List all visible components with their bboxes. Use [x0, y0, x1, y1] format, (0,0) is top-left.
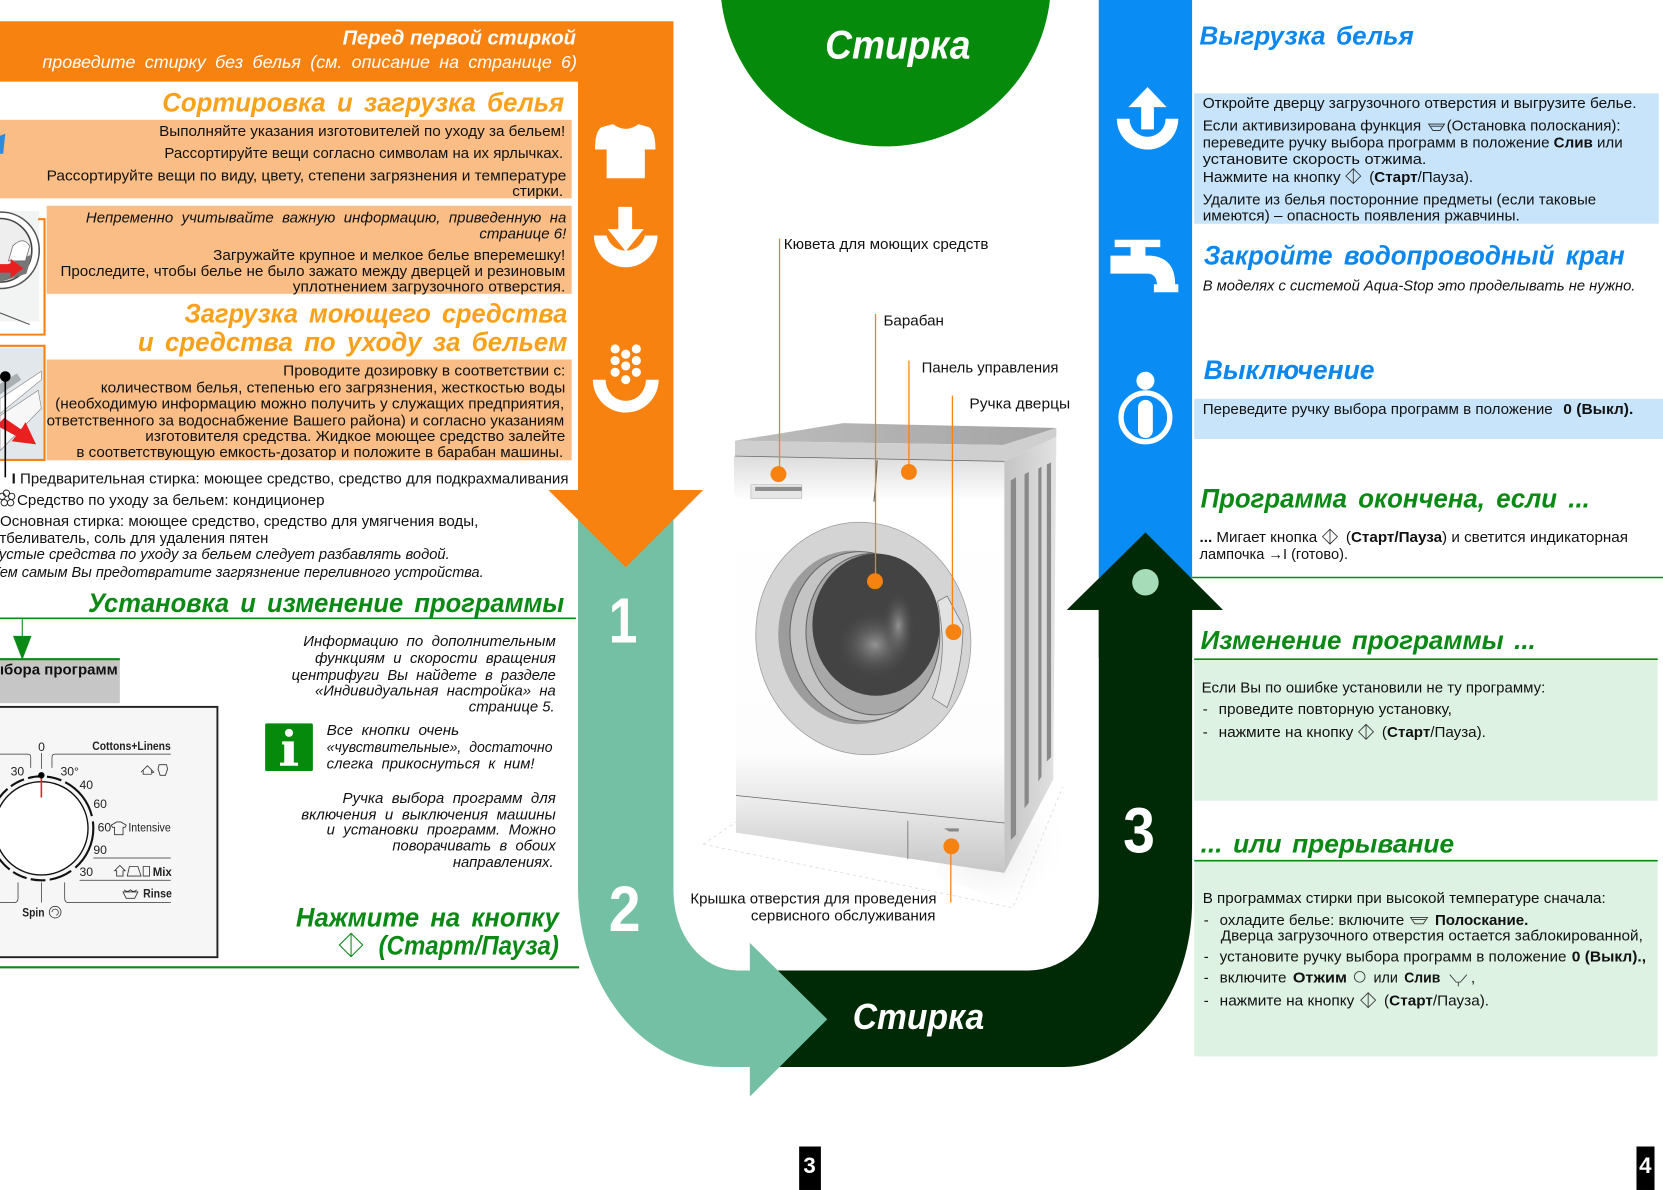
text interrupt: Дверца загрузочного отверстия остается заблокированной,	[1221, 929, 1643, 945]
text change: Если Вы по ошибке установили не ту программу:	[1202, 681, 1545, 697]
heading finished: Программа окончена, если ...	[1201, 484, 1590, 514]
background sorting	[0, 120, 572, 198]
text finished: ... Мигает кнопка	[1200, 530, 1318, 546]
heading: Перед первой стиркой	[343, 28, 576, 50]
text block sorting: Рассортируйте вещи согласно символам на их ярлычках.	[164, 146, 563, 162]
text block loading: Проследите, чтобы белье не было зажато между дверцей и резиновым	[60, 264, 565, 280]
text block: touch buttons: слегка прикоснуться к ним!	[327, 756, 535, 772]
text block: extras: центрифуги Вы найдете в разделе	[292, 668, 556, 684]
panel: close tap	[1203, 241, 1635, 295]
text block dosage	[47, 363, 565, 461]
heading detergent	[138, 298, 568, 357]
text interrupt: установите ручку выбора программ в положение	[1220, 949, 1566, 965]
rule bottom	[0, 966, 579, 968]
text block loading: Непременно учитывайте важную информацию, приведенную на	[86, 211, 566, 227]
icon: info	[265, 723, 313, 771]
icon: water tap	[1110, 240, 1178, 292]
text change: -	[1203, 702, 1208, 718]
washing machine illustration	[703, 423, 1071, 908]
icon: t-shirt	[595, 124, 655, 178]
background interrupt	[1194, 860, 1658, 1056]
text interrupt: ,	[1471, 971, 1475, 987]
text power off: Переведите ручку выбора программ в положение	[1203, 402, 1553, 418]
heading: press start: Нажмите на кнопку	[296, 902, 560, 932]
text interrupt: -	[1204, 949, 1209, 965]
text block dosage: количеством белья, степенью его загрязнения, жесткостью воды	[101, 380, 565, 396]
text block sorting: Выполняйте указания изготовителей по уходу за бельем!	[159, 124, 565, 140]
text block compartments: Основная стирка: моющее средство, средство для умягчения воды,	[0, 514, 478, 530]
text interrupt: (Старт/Пауза).	[1384, 993, 1489, 1009]
step number 2: 2	[609, 874, 641, 945]
text block: selector knob: Ручка выбора программ для	[343, 791, 556, 807]
callouts	[690, 237, 1070, 925]
text block unloading: установите скорость отжима.	[1203, 152, 1426, 168]
panel: sorting and loading	[0, 87, 572, 296]
text block: selector knob: и установки программ. Можно	[327, 823, 556, 839]
heading tap: Закройте водопроводный кран	[1204, 241, 1625, 271]
heading interrupt: ... или прерывание	[1201, 831, 1454, 859]
text interrupt: -	[1204, 971, 1209, 987]
rule change	[1194, 658, 1658, 660]
label: service cover	[690, 892, 936, 925]
text block: touch buttons: «чувствительные», достаточно	[327, 740, 553, 756]
blue sliver of photo	[0, 134, 5, 154]
heading program: Установка и изменение программы	[88, 588, 565, 618]
text block unloading: Откройте дверцу загрузочного отверстия и выгрузите белье.	[1203, 96, 1636, 112]
text change: -	[1203, 725, 1208, 741]
text finished: лампочка →I (готово).	[1200, 547, 1348, 563]
background unloading	[1194, 93, 1659, 224]
arrow 3: dark green up arrow	[769, 532, 1223, 1067]
text interrupt: Слив	[1404, 971, 1440, 987]
icon: detergent	[593, 344, 659, 413]
page number 4	[1636, 1147, 1655, 1190]
heading unloading: Выгрузка белья	[1200, 23, 1414, 51]
text block compartments: Тем самым Вы предотвратите загрязнение переливного устройства.	[0, 565, 484, 581]
arrow 3 head	[1067, 532, 1223, 658]
background power off	[1194, 399, 1663, 439]
note: проведите стирку без белья (см. описание на странице 6)	[42, 52, 577, 72]
text interrupt: охладите белье: включите	[1220, 913, 1404, 929]
text block dosage: (необходимую информацию можно получить у служащих предприятия,	[55, 396, 564, 412]
photo: detergent drawer	[0, 346, 45, 477]
text interrupt: В программах стирки при высокой температуре сначала:	[1203, 891, 1606, 907]
step number 3: 3	[1123, 796, 1155, 867]
text block: selector knob: поворачивать в обоих	[392, 839, 556, 855]
control panel dial: 40	[80, 778, 93, 792]
control panel dial: Rinse	[143, 886, 172, 900]
text block compartments: Средство по уходу за бельем: кондиционер	[17, 493, 325, 509]
text block: touch buttons: Все кнопки очень	[327, 723, 459, 739]
text block: extras	[292, 634, 556, 716]
control panel dial: Spin	[22, 905, 45, 919]
control panel dial: 90	[93, 843, 107, 857]
panel: power off	[1194, 355, 1663, 439]
text block: extras: странице 5.	[469, 700, 555, 716]
label: drum: Барабан	[883, 314, 944, 330]
text block unloading: (Остановка полоскания):	[1447, 118, 1621, 134]
text finished: (Старт/Пауза) и светится индикаторная	[1346, 530, 1628, 546]
background detergent	[47, 360, 572, 460]
heading sorting: Сортировка и загрузка белья	[162, 87, 565, 117]
text interrupt: включите	[1220, 971, 1286, 987]
control panel dial: Intensive	[128, 821, 171, 835]
text block: selector knob	[301, 791, 556, 871]
control panel dial: 60	[98, 821, 111, 835]
title: Стирка	[825, 22, 970, 67]
heading: press start: (Старт/Пауза)	[379, 931, 559, 961]
text block loading: странице 6!	[479, 227, 566, 243]
text block dosage: Проводите дозировку в соответствии с:	[283, 363, 565, 379]
label: control panel: Панель управления	[922, 360, 1058, 376]
text interrupt: 0 (Выкл).,	[1572, 949, 1646, 965]
text block unloading: Если активизирована функция	[1203, 118, 1421, 134]
text block dosage: изготовителя средства. Жидкое моющее средство залейте	[145, 429, 565, 445]
text block unloading: Удалите из белья посторонние предметы (если таковые	[1203, 193, 1596, 209]
text block: extras: функциям и скорости вращения	[315, 651, 556, 667]
text interrupt: -	[1204, 993, 1209, 1009]
pointer arrow	[14, 618, 31, 659]
control panel dial: 0	[38, 740, 45, 754]
arrow 2: teal curved arrow	[578, 490, 827, 1097]
text finished	[1200, 529, 1628, 563]
text power off: 0 (Выкл).	[1563, 402, 1633, 418]
control panel dial	[0, 707, 217, 957]
label: door handle: Ручка дверцы	[969, 396, 1070, 412]
text change: нажмите на кнопку	[1219, 725, 1354, 741]
text block: extras: Информацию по дополнительным	[303, 634, 556, 650]
panel: before first wash	[42, 28, 577, 72]
text block: selector knob: направлениях.	[453, 855, 554, 871]
text interrupt: нажмите на кнопку	[1220, 993, 1355, 1009]
icon: load arrow	[594, 207, 658, 267]
rule interrupt	[1194, 860, 1658, 862]
text block: extras: «Индивидуальная настройка» на	[315, 684, 556, 700]
control panel dial: Mix	[153, 865, 172, 879]
text block unloading: имеются) – опасность появления ржавчины.	[1203, 209, 1520, 225]
text block unloading: Нажмите на кнопку	[1203, 170, 1341, 186]
icon: power info	[1121, 372, 1170, 442]
text block sorting: Рассортируйте вещи по виду, цвету, степени загрязнения и температуре	[47, 168, 566, 184]
text interrupt: или	[1373, 971, 1398, 987]
rule finished	[1192, 577, 1663, 579]
text block sorting	[47, 124, 566, 200]
arrow label: wash: Стирка	[853, 996, 984, 1037]
text block loading: Загружайте крупное и мелкое белье вперемешку!	[213, 248, 565, 264]
control panel dial: 30	[11, 764, 24, 778]
text interrupt: -	[1204, 913, 1209, 929]
rule program	[0, 617, 576, 619]
text change: (Старт/Пауза).	[1382, 725, 1486, 741]
background change	[1194, 659, 1658, 801]
blue column	[1099, 0, 1192, 578]
label: dispenser: Кювета для моющих средств	[784, 237, 989, 253]
control panel dial: 30	[80, 865, 93, 879]
step number 1: 1	[609, 586, 637, 657]
text block unloading	[1203, 96, 1636, 225]
background loading	[47, 206, 572, 294]
label: service cover: сервисного обслуживания	[751, 909, 935, 925]
panel: unloading	[1194, 23, 1659, 225]
page number 3	[799, 1147, 821, 1190]
page number 3: 3	[803, 1153, 816, 1178]
text interrupt: Отжим	[1293, 971, 1347, 987]
heading change: Изменение программы ...	[1201, 627, 1536, 655]
text block sorting: стирки.	[512, 184, 563, 200]
arrow 1: orange band and down arrow	[0, 21, 703, 567]
text block loading	[60, 211, 566, 296]
control panel dial: Cottons+Linens	[92, 739, 171, 753]
text block compartments: I Предварительная стирка: моющее средство, средство для подкрахмаливания	[12, 472, 568, 488]
text block compartments: Густые средства по уходу за бельем следует разбавлять водой.	[0, 547, 450, 563]
text interrupt	[1203, 891, 1646, 1009]
photo: loading laundry	[0, 211, 45, 335]
panel: program setting	[0, 588, 579, 967]
text block dosage: ответственного за водоснабжение Вашего района) и согласно указаниям	[47, 413, 564, 429]
text block: touch buttons	[327, 723, 553, 772]
panel: interrupt program	[1194, 831, 1658, 1056]
text block unloading: переведите ручку выбора программ в положение Слив или	[1203, 135, 1623, 151]
panel: detergent loading	[0, 298, 572, 581]
heading power off: Выключение	[1204, 355, 1375, 385]
text block: selector knob: включения и выключения машины	[301, 807, 556, 823]
control panel dial: 60	[93, 797, 107, 811]
text block loading: уплотнением загрузочного отверстия.	[293, 280, 565, 296]
text block dosage: в соответствующую емкость-дозатор и положите в барабан машины.	[76, 445, 563, 461]
text change	[1202, 681, 1545, 741]
text change: проведите повторную установку,	[1219, 702, 1452, 718]
text interrupt: Полоскание.	[1435, 913, 1528, 929]
heading: press start	[296, 902, 560, 961]
heading detergent: Загрузка моющего средства	[185, 298, 567, 328]
page number 4: 4	[1639, 1153, 1652, 1178]
control panel dial: 30°	[60, 764, 79, 778]
dot on arrow 3	[1132, 569, 1159, 596]
panel: program finished	[1192, 484, 1663, 578]
green title circle	[720, 0, 1051, 146]
text block unloading: (Старт/Пауза).	[1369, 170, 1473, 186]
text tap: В моделях с системой Aqua-Stop это проделывать не нужно.	[1203, 279, 1635, 295]
heading detergent: и средства по уходу за бельем	[138, 327, 568, 357]
selector label	[0, 659, 120, 703]
icon: unload arrow	[1117, 87, 1178, 150]
label: service cover: Крышка отверстия для проведения	[690, 892, 936, 908]
panel: change program	[1194, 627, 1658, 801]
text block compartments	[0, 472, 568, 581]
icon: softener flower	[0, 490, 15, 506]
